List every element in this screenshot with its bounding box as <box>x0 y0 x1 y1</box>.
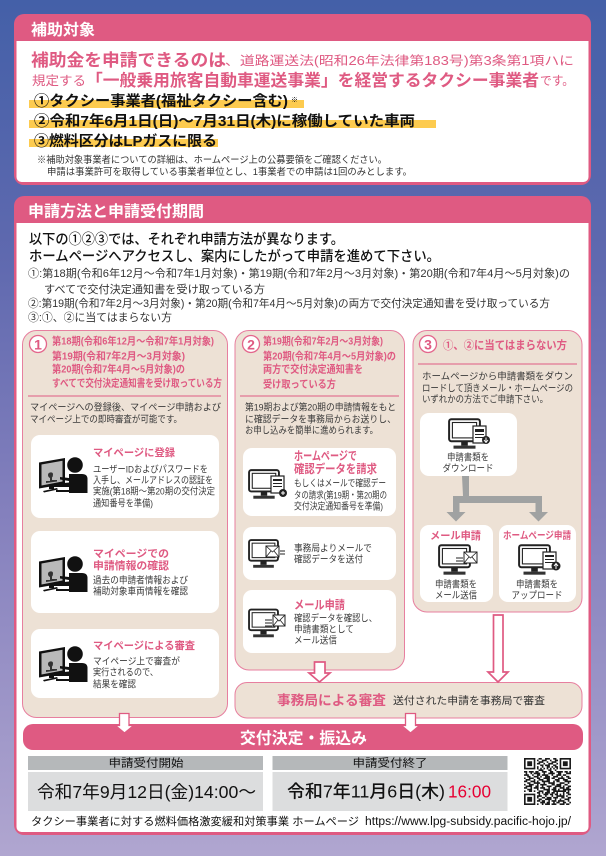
text: method conditions: ②:第19期(令和7年2月〜3月対象)・第20期(令和7年4月〜5月対象)の両方で交付決定通知書を受け取っている方 <box>28 296 550 310</box>
band title: 交付決定・振込み <box>240 730 367 748</box>
review description: 送付された申請を事務局で審査 <box>393 694 546 707</box>
icon: number 3 <box>420 336 436 352</box>
icon: computer with download <box>449 419 490 449</box>
step: my page review <box>31 629 219 698</box>
text: eligibility intro: 補助金を申請できるのは <box>31 50 226 70</box>
date value: 令和7年11月6日(木) <box>287 782 445 802</box>
text: route 2 description: お申し込みを簡単に進められます。 <box>245 424 378 436</box>
panel: route 3 <box>413 330 582 612</box>
step: register my page <box>31 435 219 518</box>
icon: person at computer <box>39 457 88 493</box>
heading: eligibility: 補助対象 <box>31 20 95 39</box>
icon: person at computer <box>39 556 88 592</box>
step text: もしくはメールで確認デー <box>294 478 386 490</box>
step text: 申請書類として <box>294 624 354 636</box>
step title <box>294 449 377 476</box>
text: eligibility intro: 、道路運送法(昭和26年法律第183号)第3条第1項ハに <box>225 53 574 68</box>
step: download form <box>420 413 517 476</box>
step title: 申請情報の確認 <box>93 559 170 572</box>
step text: アップロード <box>512 590 562 602</box>
text: route 3 description <box>422 370 573 406</box>
text: route 2 description <box>245 402 396 436</box>
date value: 令和7年9月12日(金)14:00〜 <box>37 782 256 802</box>
closing time: 16:00 <box>448 782 491 802</box>
step text <box>435 578 477 602</box>
text: route 1 description: マイページ上での即時審査が可能です。 <box>30 414 182 426</box>
text: method intro: 以下の①②③では、それぞれ申請方法が異なります。 <box>29 231 344 247</box>
heading: route 1 target: 第20期(令和7年4月〜5月対象)の <box>52 362 185 376</box>
step text: 確認データを確認し、 <box>294 612 377 624</box>
step text: ユーザーIDおよびパスワードを <box>93 464 208 476</box>
step text <box>442 452 494 474</box>
step text <box>294 612 377 646</box>
step text <box>294 542 372 566</box>
step text <box>512 578 562 602</box>
icon: number 3: 3 <box>424 336 432 352</box>
arrow: route 2 to review <box>309 662 330 682</box>
step text: 過去の申請者情報および <box>93 574 188 586</box>
date label: 申請受付終了 <box>352 756 428 770</box>
step text: ダウンロード <box>442 462 494 474</box>
text: route 2 description: 第19期および第20期の申請情報をもと <box>245 402 396 414</box>
date: application end <box>272 756 508 811</box>
icon: number 1: 1 <box>34 336 42 352</box>
arrow: route 1 to decision <box>116 714 134 733</box>
text: method conditions <box>28 266 570 324</box>
arrow: branch to two methods <box>446 476 548 522</box>
text: footnote: ※補助対象事業者についての詳細は、ホームページ上の公募要領をご確認ください。 <box>37 154 387 166</box>
step: web application <box>499 525 576 602</box>
icon: computer with mail <box>249 610 285 637</box>
text: method conditions: ①:第18期(令和6年12月〜令和7年1月対象)・第19期(令和7年2月〜3月対象)・第20期(令和7年4月〜5月対象)の <box>28 266 570 280</box>
band: grant decision <box>23 724 583 750</box>
step text: メール送信 <box>294 634 337 646</box>
step text: 実施(第18期〜第20期の交付決定 <box>93 486 215 498</box>
heading: route 3 target: ①、②に当てはまらない方 <box>443 338 567 352</box>
text: eligibility intro: です。 <box>540 74 574 88</box>
step text: 申請書類を <box>447 452 489 464</box>
panel: eligibility <box>14 14 591 185</box>
text: eligibility intro <box>31 50 574 90</box>
footer: website: https://www.lpg-subsidy.pacific-hojo.jp/ <box>365 816 572 828</box>
step title <box>93 548 170 572</box>
text: route 1 description <box>30 402 221 426</box>
text: method intro <box>29 231 440 264</box>
text: route 3 description: ホームページから申請書類をダウン <box>422 370 573 382</box>
panel: secretariat review <box>235 682 582 718</box>
step text: マイページ上で審査が <box>93 656 180 668</box>
arrow: review to decision <box>402 714 420 733</box>
date label: 申請受付開始 <box>108 756 184 770</box>
text: route 3 description: いずれかの方法でご申請下さい。 <box>422 394 548 406</box>
step text <box>294 478 387 512</box>
step text: 通知番号を準備) <box>93 498 153 510</box>
list: three conditions <box>29 92 436 150</box>
step: data sent by mail <box>243 527 396 580</box>
step title: ホームページで <box>294 449 357 463</box>
text: route 2 description: に確認データを事務局からお送りし、 <box>245 414 396 426</box>
text: method conditions: すべてで交付決定通知書を受け取っている方 <box>44 282 265 296</box>
list: three conditions: ②令和7年6月1日(日)〜7月31日(木)に稼働していた車両 <box>34 112 415 130</box>
text: footnote <box>37 154 412 178</box>
text: footnote: 申請は事業許可を取得している事業者単位とし、1事業者での申請は1回のみとします。 <box>47 166 412 178</box>
step title: マイページでの <box>93 548 169 560</box>
text: method intro: ホームページへアクセスし、案内にしたがって申請を進めて下さい。 <box>29 248 440 264</box>
heading: route 2 target <box>263 334 396 390</box>
list: three conditions: ③燃料区分はLPガスに限る <box>34 132 217 150</box>
panel: route 2 <box>235 330 404 670</box>
heading: route 2 target: 第19期(令和7年2月〜3月対象) <box>263 334 383 348</box>
step text <box>93 656 180 690</box>
icon: computer with mail <box>439 545 477 575</box>
text: eligibility intro: 「一般乗用旅客自動車運送事業」を経営するタクシー事業者 <box>86 70 539 90</box>
heading: route 1 target: 第18期(令和6年12月〜令和7年1月対象) <box>52 334 214 348</box>
icon: number 2: 2 <box>247 336 255 352</box>
list: three conditions: ①タクシー事業者(福祉タクシー含む) <box>34 92 288 110</box>
step title: メール申請 <box>430 529 481 542</box>
step text: 申請書類を <box>435 578 477 590</box>
text: method conditions: ③:①、②に当てはまらない方 <box>28 310 172 324</box>
arrow: route 3 to review <box>488 615 508 682</box>
heading: route 1 target <box>52 334 222 390</box>
heading: route 2 target: 第20期(令和7年4月〜5月対象)の <box>263 350 396 362</box>
icon: computer with document <box>249 470 287 499</box>
review title: 事務局による審査 <box>277 692 386 708</box>
heading: application method: 申請方法と申請受付期間 <box>28 202 204 220</box>
step text: 交付決定通知番号を準備) <box>294 500 383 512</box>
step title: マイページに登録 <box>93 446 175 459</box>
text: eligibility intro: 規定する <box>32 73 86 88</box>
step title: 確認データを請求 <box>294 461 377 476</box>
step text <box>93 574 188 598</box>
step text: タの請求(第19期・第20期の <box>294 490 387 502</box>
panel: route 1 <box>22 330 228 718</box>
footer: website <box>31 814 572 828</box>
panel: application method <box>14 196 591 835</box>
icon: number 1 <box>30 336 46 352</box>
date: application start <box>28 756 263 811</box>
step text: 申請書類を <box>516 578 558 590</box>
list: three conditions: ※ <box>291 96 298 104</box>
step text: 確認データを送付 <box>294 554 363 566</box>
heading: route 1 target: 第19期(令和7年2月〜3月対象) <box>52 350 185 362</box>
step text: 事務局よりメールで <box>294 542 372 554</box>
text: route 1 description: マイページへの登録後、マイページ申請および <box>30 402 221 414</box>
icon: computer with outgoing mail <box>249 540 285 568</box>
step title: メール申請 <box>294 597 345 612</box>
icon: number 2 <box>242 336 260 352</box>
step: mail application <box>420 525 493 602</box>
step text <box>93 464 215 510</box>
heading: route 1 target: すべてで交付決定通知書を受け取っている方 <box>52 376 222 390</box>
step title: ホームページ申請 <box>503 529 571 542</box>
step text: 補助対象車両情報を確認 <box>93 586 188 598</box>
heading: route 2 target: 受け取っている方 <box>263 378 336 390</box>
footer: website: タクシー事業者に対する燃料価格激変緩和対策事業 ホームページ <box>31 814 359 828</box>
step text: メール送信 <box>435 590 477 602</box>
heading: route 2 target: 両方で交付決定通知書を <box>263 362 363 376</box>
text: route 3 description: ロードして頂きメール・ホームページの <box>422 384 573 394</box>
QR code <box>524 758 571 805</box>
icon: computer with upload <box>519 545 560 575</box>
step: confirm application info <box>31 531 219 613</box>
step: request confirmation data <box>243 448 396 516</box>
icon: person at computer <box>39 646 88 682</box>
step title: マイページによる審査 <box>93 639 195 652</box>
step: apply by mail <box>243 590 396 653</box>
step text: 実行されるので、 <box>93 666 158 678</box>
step text: 入手し、メールアドレスの認証を <box>93 474 213 486</box>
step text: 結果を確認 <box>93 678 136 690</box>
